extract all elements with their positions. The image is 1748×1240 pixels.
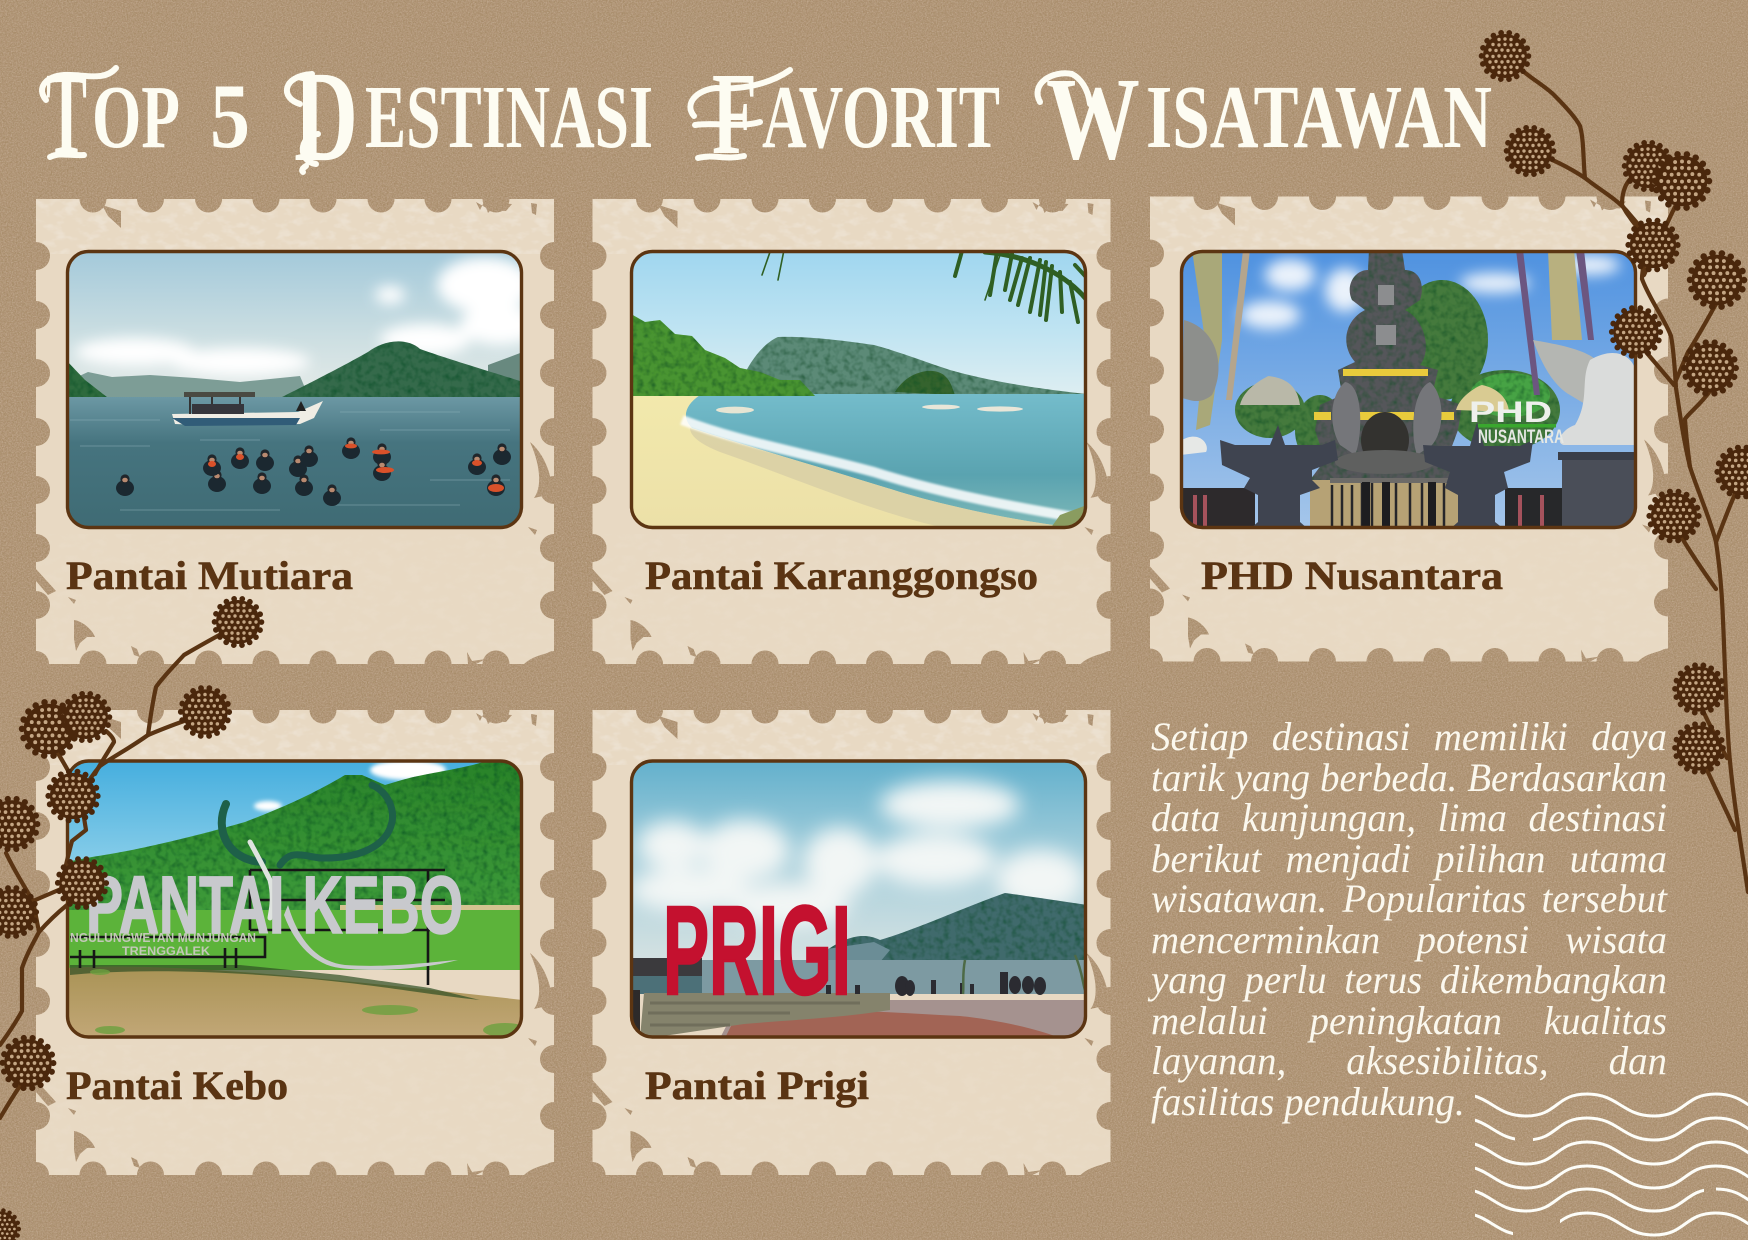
sign: PRIGI: PRIGI (663, 880, 851, 1021)
shrine pillars (1220, 422, 1533, 529)
title: 5 (210, 65, 250, 167)
label: Pantai Kebo: Pantai Kebo (66, 1063, 288, 1108)
photo: Pantai Mutiara (66, 250, 540, 529)
sign frame (70, 870, 445, 985)
temple tower (1310, 250, 1470, 480)
divers (116, 437, 511, 506)
label: PHD Nusantara: PHD Nusantara (1201, 553, 1503, 598)
decorative wavy lines (1459, 1094, 1748, 1235)
panel: Pantai Karanggongso (592, 199, 1110, 664)
photo: Pantai Prigi (630, 760, 1087, 1038)
title: isatawan (1146, 33, 1492, 175)
photo: PHD Nusantara (1180, 250, 1637, 530)
paragraph text (1148, 714, 1668, 1124)
botanical branch: bottom left (0, 598, 261, 1240)
paragraph text: Setiap destinasi memiliki daya (1151, 714, 1667, 759)
sign: PANTAI KEBO: PANTAI KEBO (86, 860, 463, 951)
sign: PANTAI KEBO: NGULUNGWETAN MUNJUNGAN (70, 930, 256, 945)
title: W (1046, 53, 1140, 184)
paragraph text: yang perlu terus dikembangkan (1151, 957, 1667, 1002)
panel: Pantai Kebo (36, 710, 554, 1175)
umbrellas (1240, 376, 1509, 412)
title: F (712, 48, 757, 179)
title: estinasi (365, 33, 653, 175)
paragraph text: layanan, aksesibilitas, dan (1151, 1038, 1667, 1083)
title: D (294, 45, 358, 189)
title: T (46, 48, 87, 179)
paragraph text: data kunjungan, lima destinasi (1151, 795, 1667, 840)
sign: PHD Nusantara: PHD (1469, 396, 1552, 429)
sign: PANTAI KEBO: TRENGGALEK (122, 944, 210, 958)
logo horns (222, 785, 392, 918)
title: avorit (762, 33, 1000, 175)
paragraph text: berikut menjadi pilihan utama (1151, 836, 1667, 881)
sign: PANTAI KEBO (70, 875, 462, 955)
paragraph text: fasilitas pendukung. (1151, 1079, 1465, 1124)
paragraph text: melalui peningkatan kualitas (1151, 998, 1667, 1043)
panel: PHD Nusantara (1150, 196, 1668, 662)
banners (1192, 250, 1594, 430)
label: Pantai Karanggongso: Pantai Karanggongso (645, 553, 1038, 598)
paragraph text: mencerminkan potensi wisata (1151, 917, 1667, 962)
panel: Pantai Mutiara (36, 199, 554, 664)
gate and ground (1183, 478, 1562, 526)
label: Pantai Mutiara: Pantai Mutiara (66, 553, 353, 598)
sign: PHD Nusantara (1472, 402, 1564, 443)
botanical branch: top right (1482, 32, 1748, 892)
boat (172, 392, 323, 426)
panel: Pantai Prigi (592, 710, 1110, 1175)
statue (1533, 340, 1637, 530)
label: Pantai Prigi: Pantai Prigi (645, 1063, 869, 1108)
people (826, 972, 1046, 996)
photo: Pantai Kebo (66, 760, 527, 1038)
title (42, 33, 1492, 189)
photo: Pantai Karanggongso (630, 250, 1087, 529)
paragraph text: tarik yang berbeda. Berdasarkan (1151, 755, 1667, 800)
title: op (92, 33, 180, 175)
title swash ornaments (42, 68, 1090, 172)
sign: PHD Nusantara: NUSANTARA (1478, 427, 1564, 448)
paragraph text: wisatawan. Popularitas tersebut (1151, 876, 1667, 921)
